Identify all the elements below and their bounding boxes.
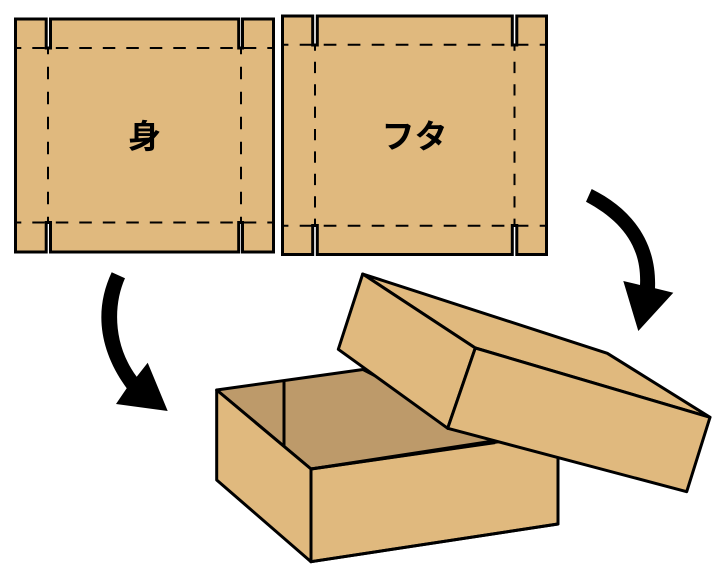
box interior — [217, 370, 500, 469]
arrow: body net to box — [101, 272, 168, 411]
label: lid: フタ — [382, 118, 448, 155]
box front face — [311, 443, 558, 562]
lid left side — [338, 274, 475, 428]
panel: body net (身) — [16, 19, 274, 252]
label: body: 身 — [128, 118, 161, 155]
illustration: assembled box — [217, 370, 558, 562]
illustration: lid — [338, 274, 710, 492]
lid front side — [448, 348, 710, 492]
lid top face — [363, 274, 710, 417]
box left face — [217, 390, 311, 562]
panel: lid net (フタ) — [282, 16, 546, 254]
box interior corner — [282, 381, 286, 447]
arrow: lid net to box — [586, 189, 673, 331]
box right-hand back section — [311, 433, 558, 562]
